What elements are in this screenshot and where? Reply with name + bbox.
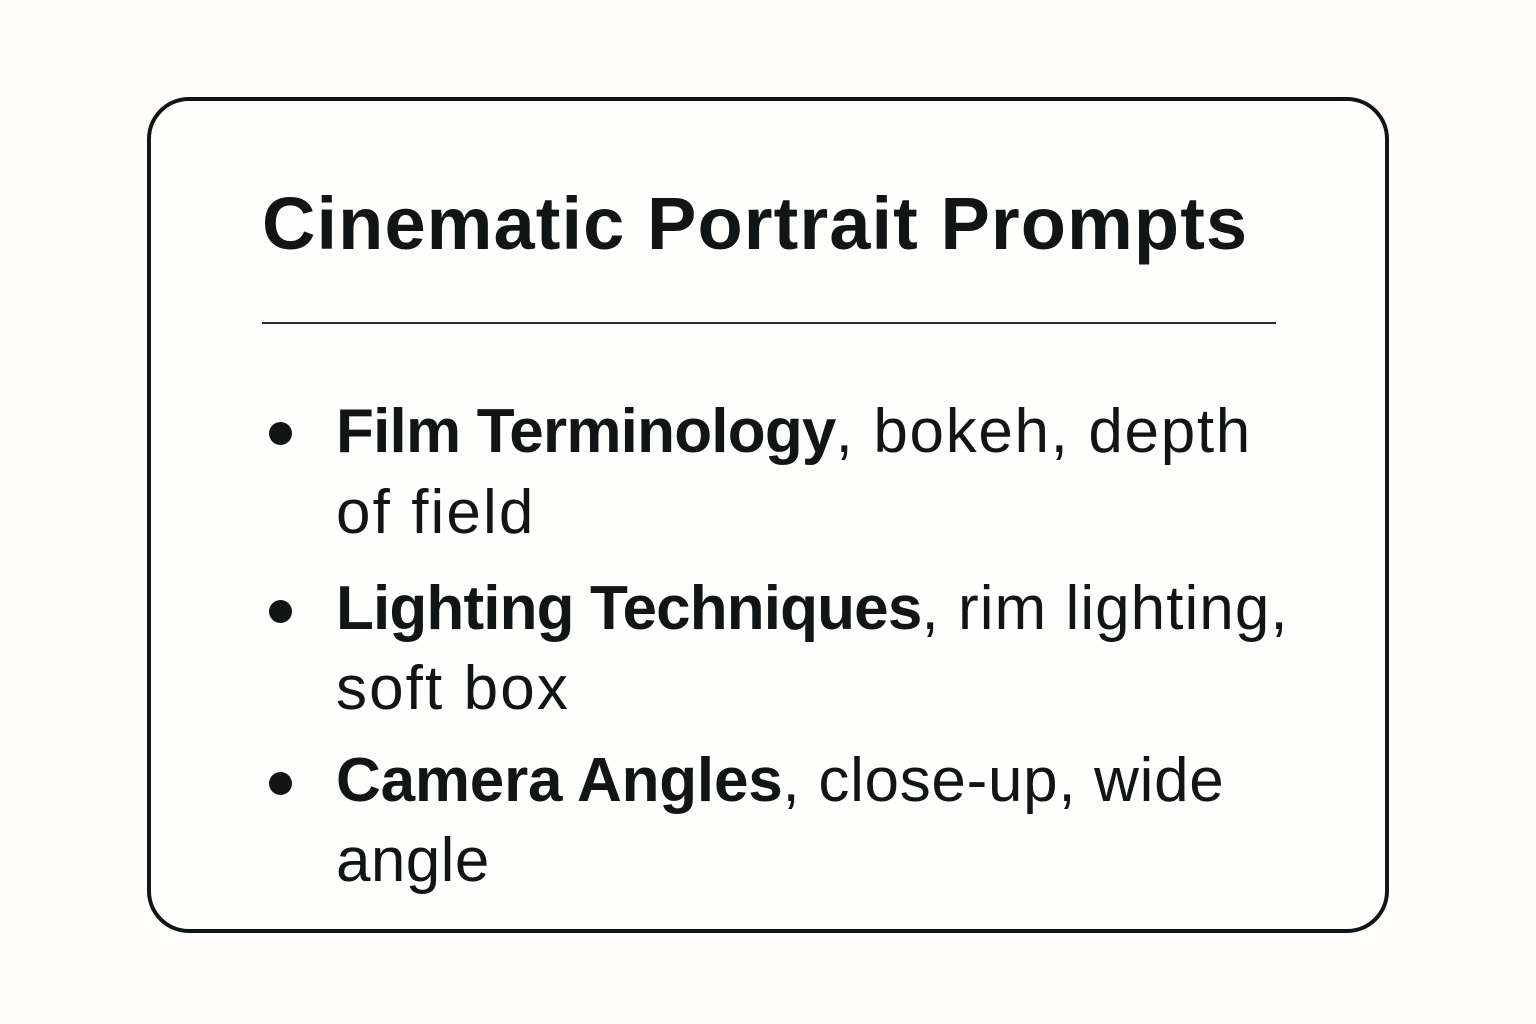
bullet 1 marker <box>269 422 292 445</box>
divider <box>262 322 1276 324</box>
bullet list <box>269 397 1289 895</box>
bullet 3 text line 1: Camera Angles, close-up, wide <box>336 746 1224 815</box>
bullet 3 text line 2: angle <box>336 826 490 895</box>
bullet 1 text line 2: of field <box>336 478 535 547</box>
panel: prompt card <box>147 97 1389 933</box>
bullet 2 text line 1: Lighting Techniques, rim lighting, <box>336 574 1289 643</box>
bullet 1 text line 1: Film Terminology, bokeh, depth <box>336 397 1252 466</box>
bullet 3 marker <box>269 772 292 795</box>
bullet 2 text line 2: soft box <box>336 654 570 723</box>
bullet 2 marker <box>269 600 292 623</box>
title: Cinematic Portrait Prompts <box>262 182 1248 265</box>
